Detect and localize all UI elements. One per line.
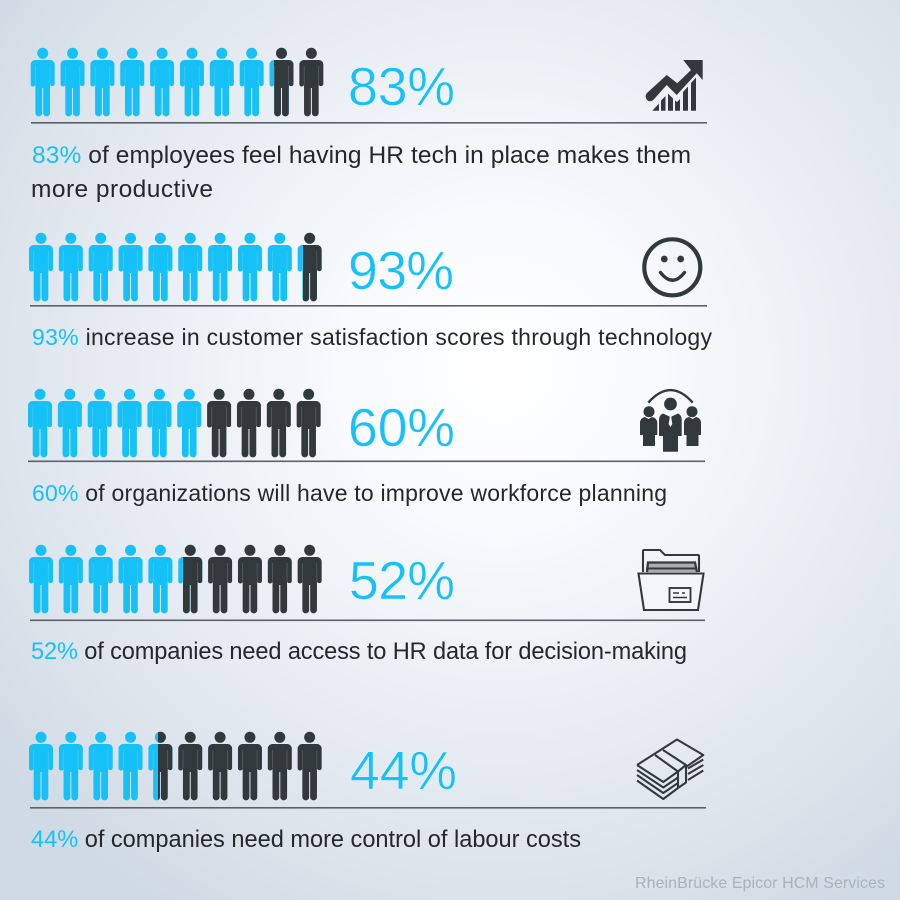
divider line <box>30 305 707 307</box>
people row: 44 percent <box>29 732 322 800</box>
panel: workforce planning 60% <box>28 389 705 506</box>
caption: 83%: 83% of employees feel having HR tech in place makes them <box>32 142 691 169</box>
icon: team of three people <box>640 390 701 452</box>
people row: 93 percent <box>29 233 322 301</box>
panel: productivity 83% <box>31 48 707 203</box>
icon: smiley face <box>644 239 700 295</box>
icon: rising chart arrow <box>646 60 703 111</box>
divider line <box>30 620 705 621</box>
icon: file folder <box>638 550 704 610</box>
caption: 93%: 93% increase in customer satisfaction scores through technology <box>32 324 712 350</box>
percentage: 93%: 93% <box>348 242 454 301</box>
caption: 83%: more productive <box>31 176 213 203</box>
people row: 83 percent <box>31 48 323 116</box>
people row: 60 percent <box>28 389 321 457</box>
panel: satisfaction 93% <box>29 233 712 350</box>
divider line <box>28 460 705 462</box>
caption: 83% <box>31 142 691 203</box>
divider line <box>31 122 707 124</box>
caption: 60%: 60% of organizations will have to improve workforce planning <box>32 480 667 506</box>
source credit: RheinBrücke Epicor HCM Services <box>635 875 885 892</box>
people row: 52 percent <box>29 545 322 613</box>
percentage: 83%: 83% <box>348 58 455 117</box>
icon: stack of banknotes <box>637 740 703 799</box>
panel: HR data 52% <box>29 545 705 665</box>
caption: 52%: 52% of companies need access to HR data for decision-making <box>31 639 687 665</box>
panel: labour costs 44% <box>29 732 706 853</box>
percentage: 52%: 52% <box>349 552 455 611</box>
percentage: 60%: 60% <box>348 399 455 458</box>
percentage: 44%: 44% <box>350 742 457 801</box>
divider line <box>30 807 706 809</box>
caption: 44%: 44% of companies need more control of labour costs <box>31 827 581 853</box>
